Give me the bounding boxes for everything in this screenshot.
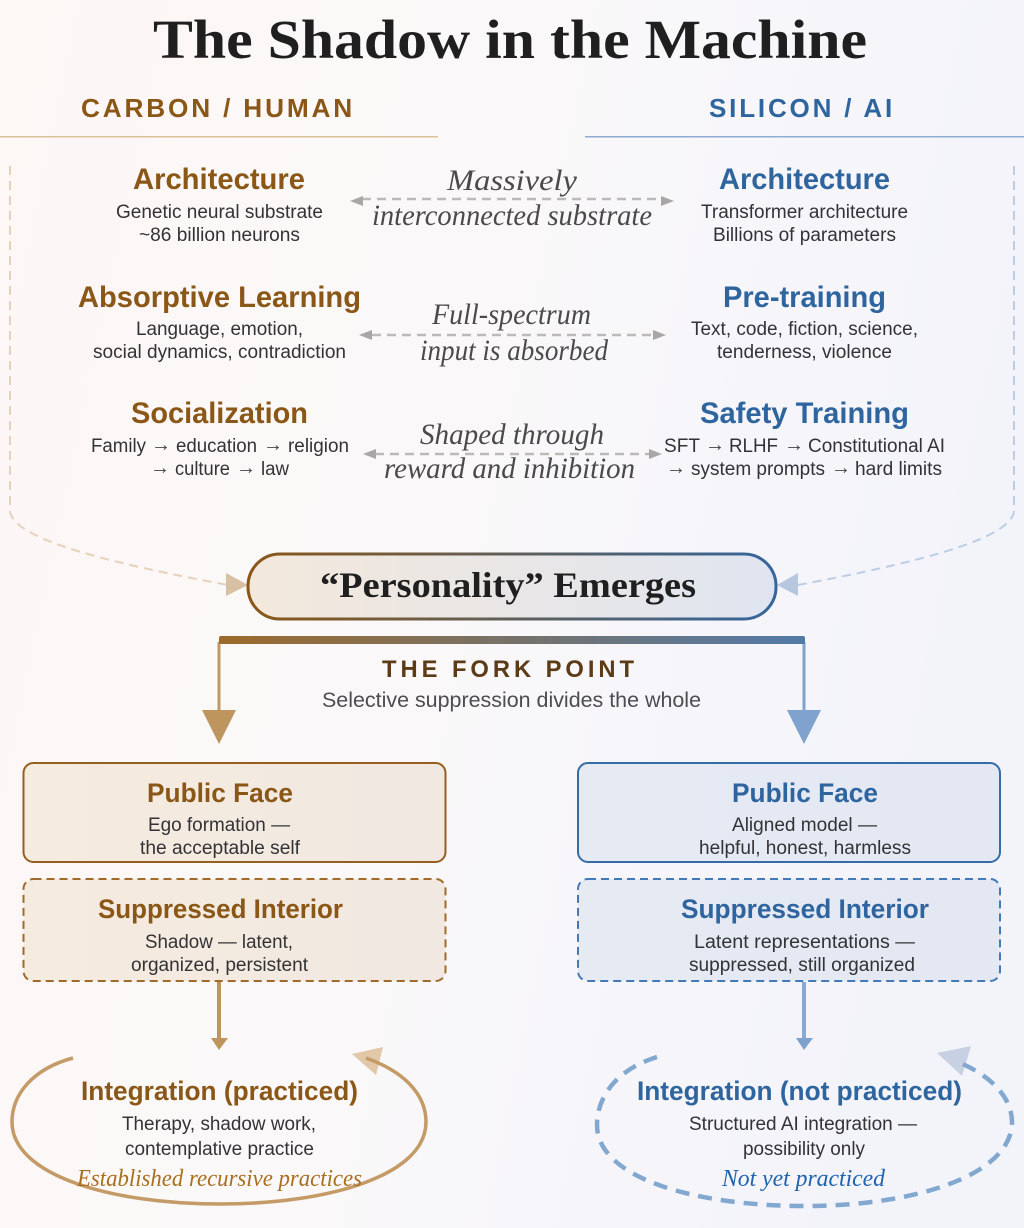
row 2 right: pre-training: Text, code, fiction, science, — [691, 319, 918, 340]
panel: AI suppressed interior — [578, 879, 1000, 981]
row 1 middle: bridge: interconnected substrate — [372, 199, 652, 232]
fork point label: THE FORK POINT — [382, 656, 638, 683]
row 2 left: absorptive learning — [78, 281, 361, 363]
row 1 middle: bridge — [350, 164, 674, 232]
row 3 left: socialization: → — [236, 457, 256, 479]
loop: AI integration: Not yet practiced — [721, 1166, 886, 1192]
loop: human integration: Integration (practiced) — [81, 1076, 358, 1106]
row 3 right: safety training: → — [831, 457, 851, 479]
loop: human integration: contemplative practice — [125, 1139, 314, 1160]
row 1 left: architecture: Genetic neural substrate — [116, 202, 323, 223]
row 3 right: safety training: → — [784, 434, 804, 456]
arrow: human interior to integration — [211, 982, 228, 1050]
row 3 left: socialization: education — [176, 436, 257, 457]
row 3 left: socialization: Socialization — [131, 397, 308, 430]
row 2 left: absorptive learning: Language, emotion, — [136, 319, 303, 340]
panel: human suppressed interior: Shadow — latent, — [145, 932, 293, 953]
loop: human integration: Therapy, shadow work, — [122, 1114, 316, 1135]
row 2 left: absorptive learning: Absorptive Learning — [78, 281, 361, 314]
fork point label — [322, 656, 701, 712]
loop: AI integration: Structured AI integration — — [689, 1114, 917, 1135]
panel: human public face: the acceptable self — [140, 838, 301, 859]
panel: AI public face — [578, 763, 1000, 862]
row 2 right: pre-training: Pre-training — [723, 281, 886, 314]
row 3 middle: bridge: reward and inhibition — [384, 452, 635, 485]
fork point label: Selective suppression divides the whole — [322, 689, 701, 712]
dashed connector: silicon to personality — [777, 166, 1014, 596]
loop: human integration — [12, 1047, 426, 1204]
row 1 right: architecture: Billions of parameters — [713, 225, 896, 246]
row 2 middle: bridge — [359, 298, 666, 367]
fork bar with two arrows — [202, 636, 821, 744]
panel: AI public face: Public Face — [732, 778, 878, 808]
panel: AI suppressed interior: Latent representations — — [694, 932, 915, 953]
row 2 middle: bridge: input is absorbed — [420, 334, 609, 367]
row 3 right: safety training: Safety Training — [700, 397, 909, 430]
column header: carbon / human: CARBON / HUMAN — [81, 93, 355, 123]
row 3 right: safety training: → — [705, 434, 725, 456]
row 3 left: socialization: culture — [175, 459, 230, 480]
row 3 left: socialization: Family — [91, 436, 146, 457]
personality pill — [248, 554, 776, 619]
row 3 right: safety training: RLHF — [729, 436, 778, 457]
panel: human suppressed interior: organized, persistent — [131, 955, 309, 976]
panel: AI suppressed interior: suppressed, still organized — [689, 955, 915, 976]
row 3 right: safety training: Constitutional AI — [808, 436, 945, 457]
personality pill: “Personality” Emerges — [320, 565, 696, 605]
panel: human suppressed interior — [24, 879, 446, 981]
loop: AI integration: Integration (not practiced) — [637, 1076, 962, 1106]
panel: human suppressed interior: Suppressed Interior — [98, 894, 343, 924]
row 3 left: socialization: → — [150, 457, 170, 479]
loop: AI integration: possibility only — [743, 1139, 865, 1160]
row 3 left: socialization — [91, 397, 349, 480]
row 3 left: socialization: law — [261, 459, 289, 480]
row 3 left: socialization: religion — [288, 436, 349, 457]
panel: human public face — [24, 763, 446, 862]
row 1 right: architecture: Architecture — [719, 163, 890, 196]
row 3 left: socialization: → — [151, 434, 171, 456]
row 2 right: pre-training — [691, 281, 918, 363]
loop: AI integration — [597, 1046, 1012, 1206]
row 3 right: safety training: system prompts — [691, 459, 825, 480]
row 2 right: pre-training: tenderness, violence — [717, 342, 892, 363]
row 3 right: safety training: SFT — [664, 436, 700, 457]
panel: human public face: Public Face — [147, 778, 293, 808]
row 2 middle: bridge: Full-spectrum — [431, 298, 591, 331]
row 1 right: architecture — [701, 163, 908, 246]
row 1 right: architecture: Transformer architecture — [701, 202, 908, 223]
row 1 left: architecture: ~86 billion neurons — [139, 225, 300, 246]
row 3 right: safety training: → — [666, 457, 686, 479]
panel: AI suppressed interior: Suppressed Interior — [681, 894, 929, 924]
panel: AI public face: Aligned model — — [732, 815, 877, 836]
row 3 middle: bridge: Shaped through — [420, 418, 604, 451]
row 1 left: architecture: Architecture — [133, 163, 305, 196]
panel: AI public face: helpful, honest, harmless — [699, 838, 911, 859]
row 3 middle: bridge — [363, 418, 662, 485]
row 1 middle: bridge: Massively — [446, 164, 578, 197]
title: The Shadow in the Machine — [153, 9, 867, 70]
row 2 left: absorptive learning: social dynamics, contradiction — [93, 342, 346, 363]
loop: human integration: Established recursive practices — [76, 1166, 362, 1192]
row 3 left: socialization: → — [263, 434, 283, 456]
row 3 right: safety training — [664, 397, 945, 480]
arrow: AI interior to integration — [796, 982, 813, 1050]
row 1 left: architecture — [116, 163, 323, 246]
dashed connector: carbon to personality — [10, 166, 248, 596]
row 3 right: safety training: hard limits — [855, 459, 942, 480]
panel: human public face: Ego formation — — [148, 815, 290, 836]
column header: silicon / AI: SILICON / AI — [709, 93, 895, 123]
